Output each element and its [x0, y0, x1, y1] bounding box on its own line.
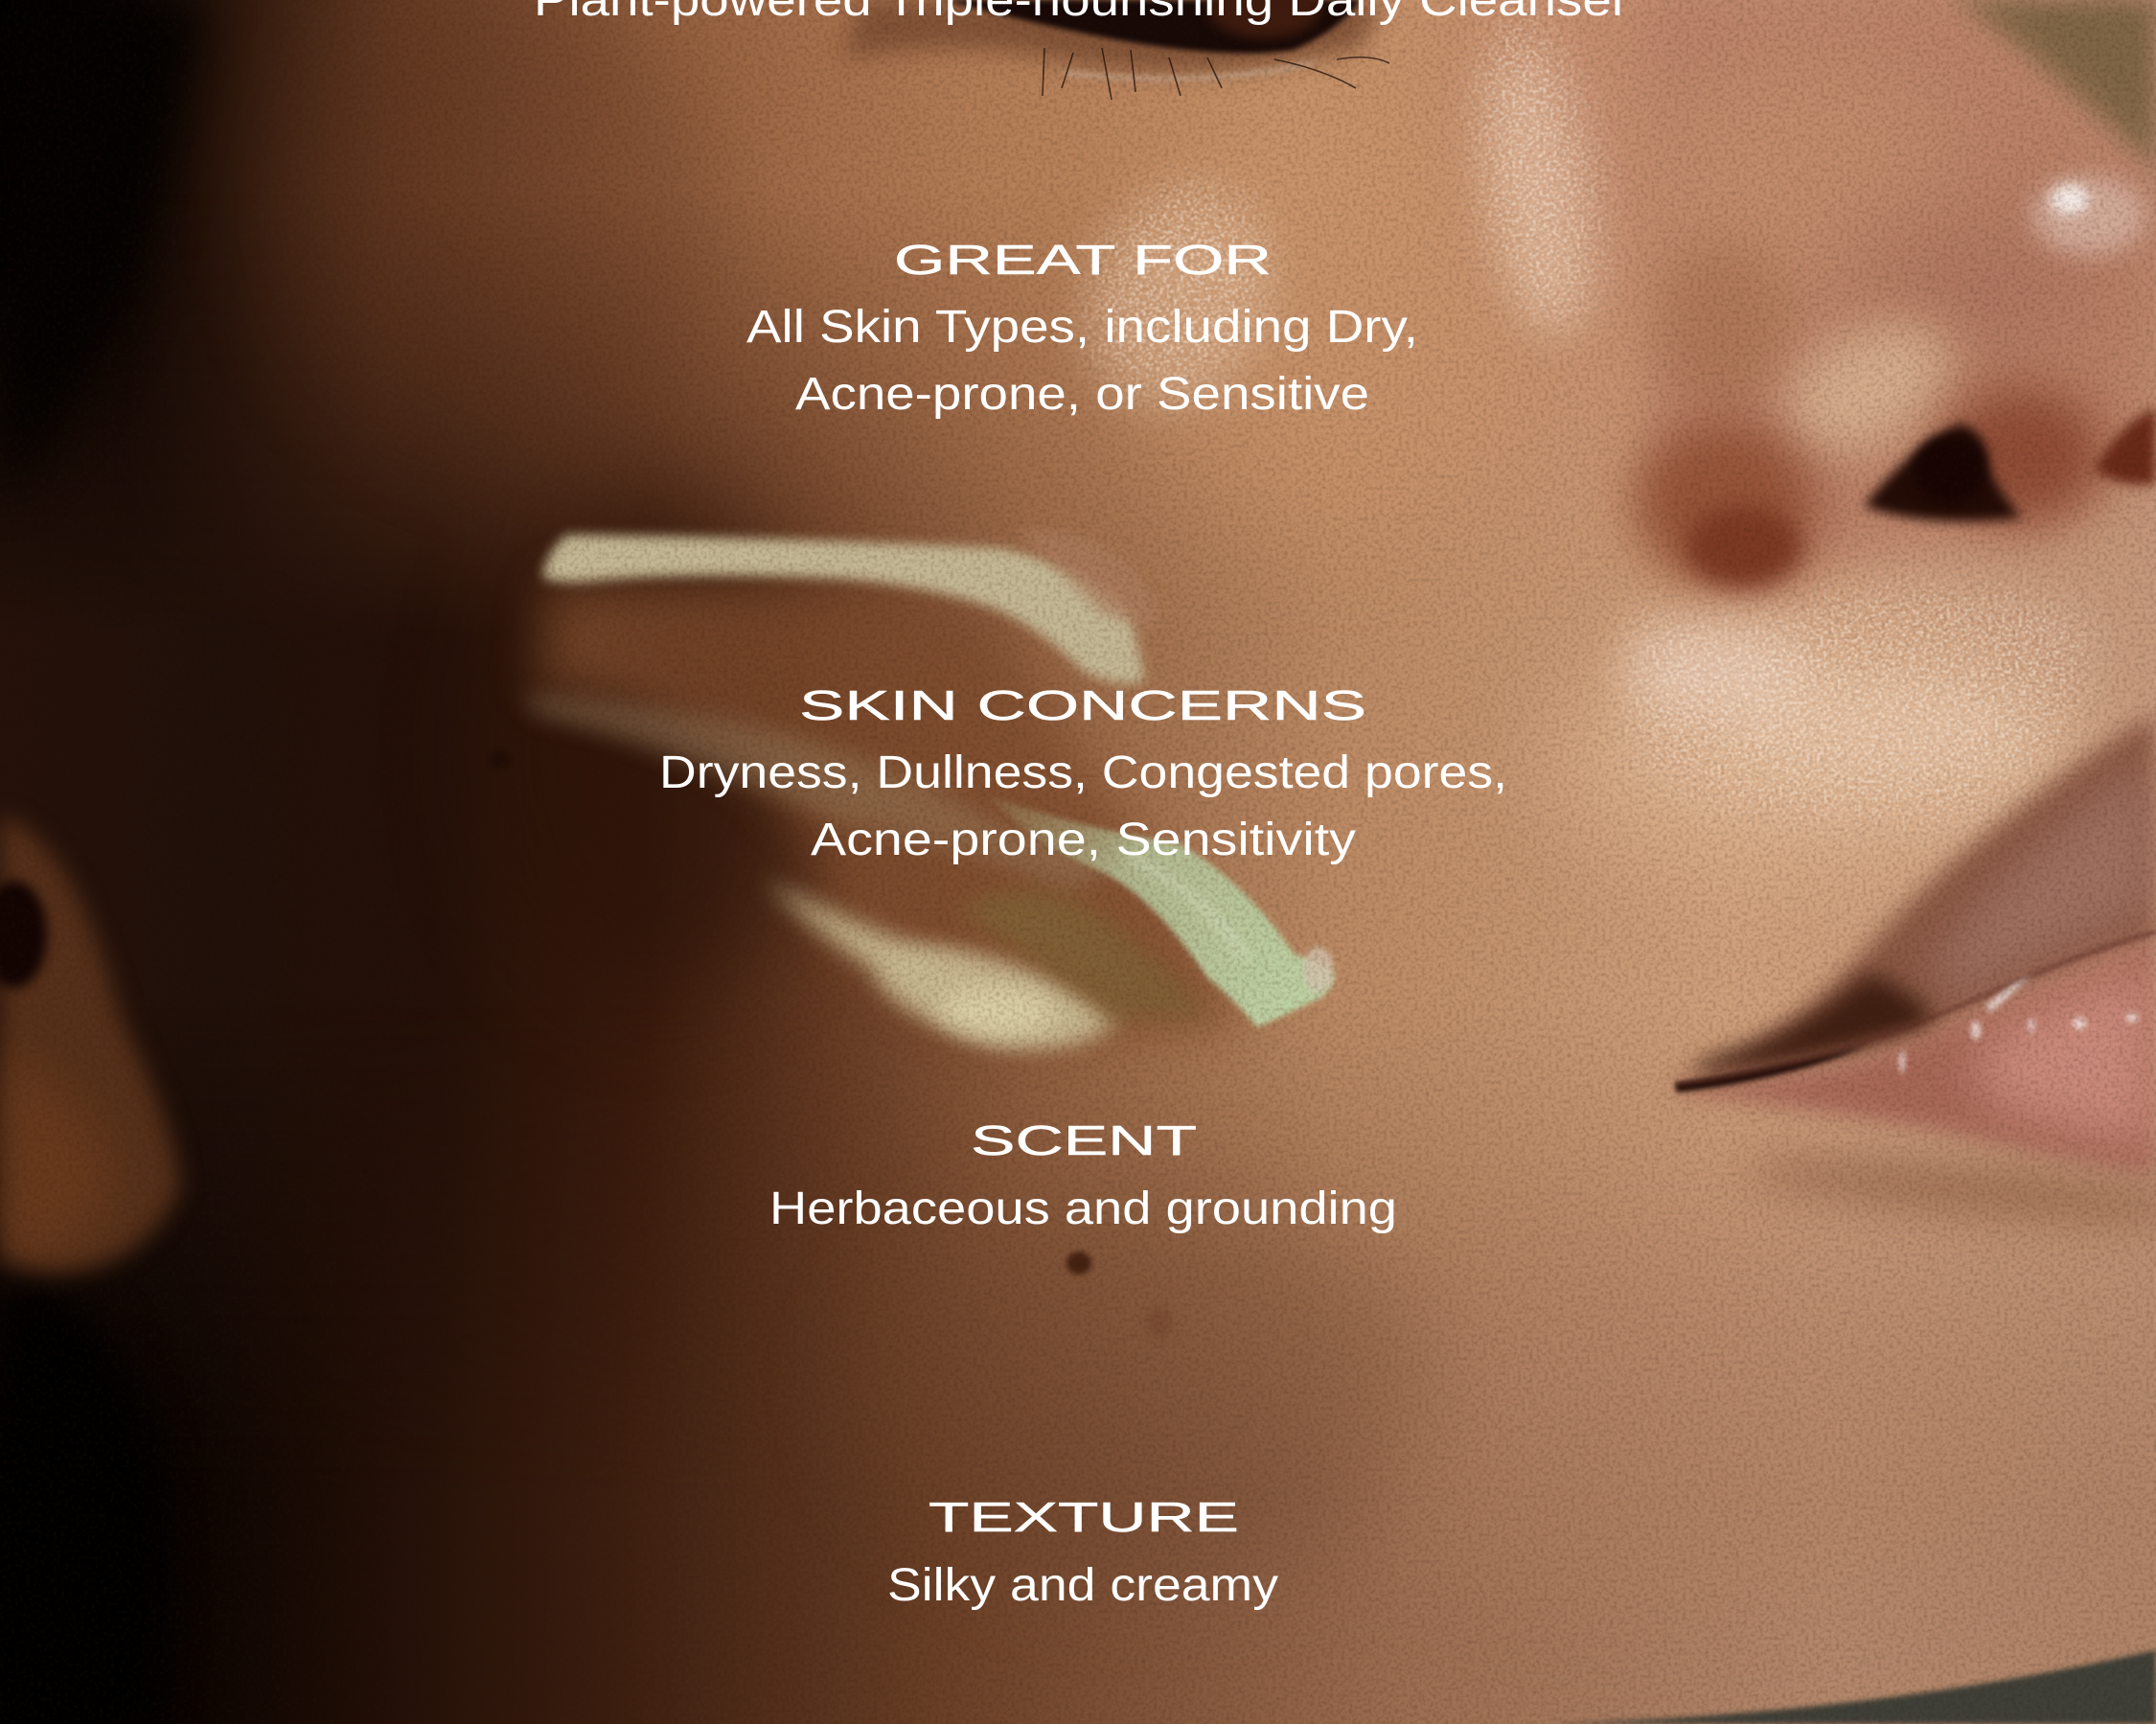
upper band — [542, 535, 1145, 683]
heading: skin concerns: SKIN CONCERNS — [799, 682, 1366, 729]
nose wing shadow — [1634, 422, 1816, 585]
shadow under lower lip — [1743, 1149, 2156, 1231]
text: skin concerns details: Acne-prone, Sensitivity — [811, 815, 1356, 865]
text: great for details — [746, 302, 1418, 420]
lower patch — [767, 882, 1116, 1045]
ear — [0, 815, 180, 1271]
heading: texture: TEXTURE — [929, 1494, 1239, 1541]
nostril dark — [1940, 388, 2103, 522]
text: scent details: Herbaceous and grounding — [769, 1184, 1397, 1234]
pale underside of nose — [1762, 296, 1975, 480]
lips — [1675, 714, 2156, 1231]
background top right — [1950, 0, 2156, 172]
cream swipe — [522, 529, 1334, 1063]
section: scent — [769, 1117, 1397, 1234]
tan fold — [958, 891, 1207, 1016]
green ridge — [987, 795, 1334, 1027]
glossy highlights — [1052, 3, 2091, 828]
text: texture details: Silky and creamy — [887, 1560, 1278, 1611]
text: skin concerns details: Dryness, Dullness, Congested pores, — [659, 747, 1507, 798]
nose — [1634, 0, 2156, 592]
cream shadow tone — [537, 583, 1246, 1045]
eye — [843, 0, 1389, 100]
nose tip highlight — [2031, 175, 2146, 256]
background bottom right — [1543, 1650, 2156, 1724]
section: great for — [746, 237, 1418, 420]
text: great for details: All Skin Types, including Dry, — [746, 302, 1418, 353]
text: great for details: Acne-prone, or Sensitive — [795, 369, 1369, 420]
faint middle band — [522, 695, 1121, 891]
heading: scent: SCENT — [971, 1117, 1197, 1164]
soft light on cheek — [278, 0, 2089, 1600]
heading: great for: GREAT FOR — [894, 237, 1272, 284]
section: texture — [887, 1494, 1278, 1611]
section: skin concerns — [659, 682, 1507, 865]
text: skin concerns details — [659, 747, 1507, 865]
hair — [0, 0, 206, 1724]
moles and spots — [491, 751, 1171, 1338]
